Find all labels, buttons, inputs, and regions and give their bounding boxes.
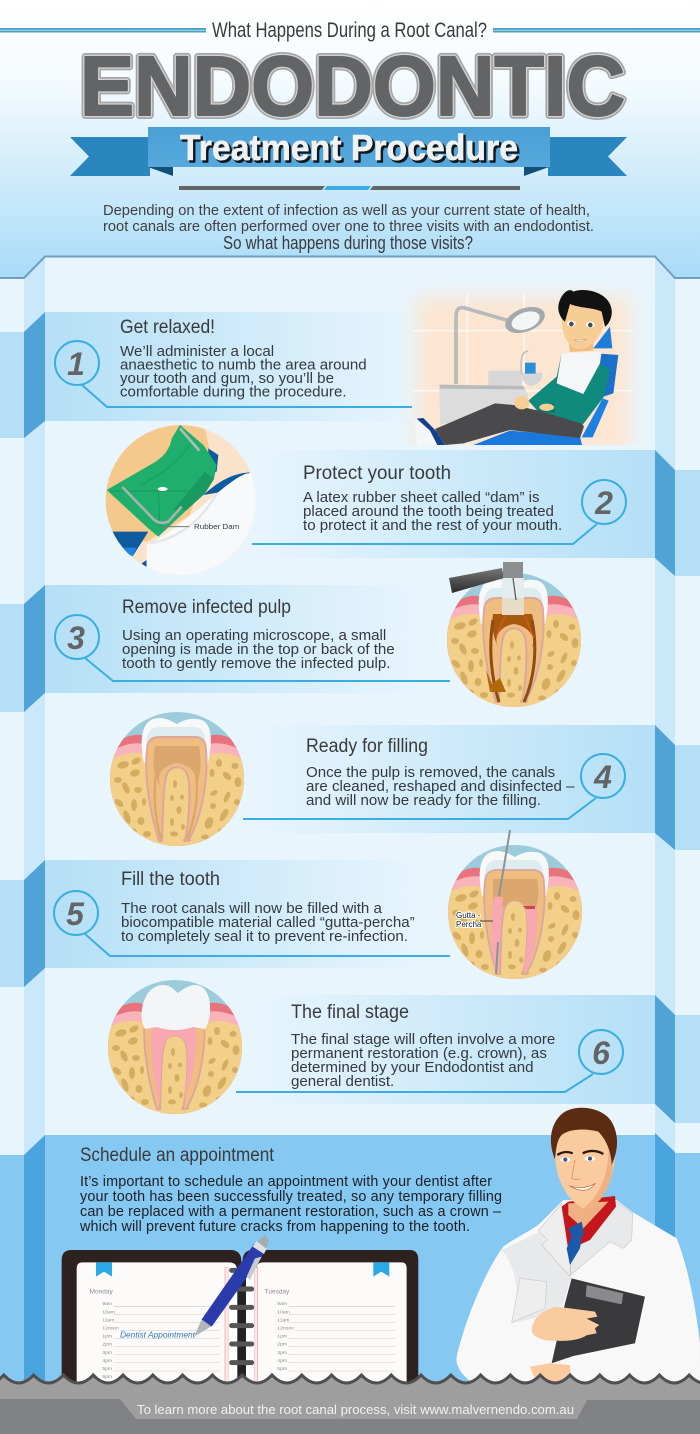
body text: tooth to gently remove the infected pulp. xyxy=(122,655,391,672)
illustration: appointment diary: 4pm xyxy=(102,1358,112,1364)
title: ENDODONTIC: ENDODONTIC xyxy=(80,39,625,133)
body text xyxy=(79,1174,502,1235)
footer link text: To learn more about the root canal process, visit www.malvernendo.com.au xyxy=(137,1402,574,1417)
illustration: appointment diary: 10am xyxy=(102,1309,115,1315)
step 4 panel xyxy=(45,709,655,849)
body text xyxy=(306,764,575,809)
illustration: cleaned tooth xyxy=(107,709,247,849)
illustration: appointment diary: 6pm xyxy=(102,1374,112,1380)
illustration: appointment diary: 3pm xyxy=(102,1350,112,1356)
body text: permanent restoration (e.g. crown), as xyxy=(291,1045,547,1062)
body text: to completely seal it to prevent re-infection. xyxy=(121,928,408,945)
side bands xyxy=(0,312,700,1123)
final panel: schedule an appointment xyxy=(0,1133,700,1395)
illustration: tooth being filled xyxy=(445,830,585,982)
title: Fill the tooth xyxy=(121,869,220,890)
number badge 2 xyxy=(252,480,626,544)
illustration: appointment diary: 11am xyxy=(102,1317,114,1323)
illustration: rubber dam: Rubber Dam xyxy=(194,522,239,531)
body text: your tooth and gum, so you’ll be xyxy=(120,370,334,387)
drill xyxy=(449,562,523,600)
label: gutta percha xyxy=(456,911,493,929)
number badge 5: 5 xyxy=(66,896,85,932)
illustration: appointment diary xyxy=(62,1235,418,1387)
title: Schedule an appointment xyxy=(80,1145,275,1166)
illustration: appointment diary: 9am xyxy=(102,1301,112,1307)
illustration: appointment diary: Tuesday xyxy=(265,1289,290,1296)
body text: anaesthetic to numb the area around xyxy=(120,356,367,374)
body text: A latex rubber sheet called “dam” is xyxy=(303,489,540,506)
body text: which will prevent future cracks from happening to the tooth. xyxy=(79,1219,470,1235)
illustration: appointment diary: Monday xyxy=(90,1289,113,1296)
illustration: appointment diary: 3pm xyxy=(277,1350,287,1356)
number badge 3: 3 xyxy=(67,620,85,656)
body text xyxy=(291,1031,555,1090)
number badge 6 xyxy=(236,1030,623,1092)
pen xyxy=(194,1235,269,1337)
illustration: appointment diary: 4pm xyxy=(277,1358,287,1364)
illustration: appointment diary: 1pm xyxy=(102,1333,112,1339)
footer: scalloped grey band xyxy=(0,1375,700,1434)
body text xyxy=(303,489,562,534)
label: gutta percha: Percha xyxy=(456,920,482,929)
intro text: root canals are often performed over one to three visits with an endodontist. xyxy=(103,219,594,235)
illustration: appointment diary: 5pm xyxy=(277,1366,287,1372)
body text: general dentist. xyxy=(291,1073,394,1090)
illustration: dentist with clipboard xyxy=(456,1108,700,1383)
step 3 panel xyxy=(45,562,655,710)
body text: We’ll administer a local xyxy=(120,343,274,360)
body text: The final stage will often involve a more xyxy=(291,1031,555,1048)
header line with subtitle: What Happens During a Root Canal? xyxy=(212,19,487,42)
body text xyxy=(122,627,395,672)
title: Remove infected pulp xyxy=(122,597,291,618)
illustration: appointment diary: 5pm xyxy=(102,1366,112,1372)
illustration: appointment diary: 2pm xyxy=(277,1342,287,1348)
body text: biocompatible material called “gutta-percha” xyxy=(121,914,415,931)
step 5 panel xyxy=(45,830,655,982)
body text: Once the pulp is removed, the canals xyxy=(306,764,555,781)
body text xyxy=(121,900,415,945)
intro text: Depending on the extent of infection as well as your current state of health, xyxy=(103,203,590,219)
number badge 3 xyxy=(55,615,450,681)
body text: your tooth has been successfully treated, so any temporary filling xyxy=(80,1189,502,1205)
title: Get relaxed! xyxy=(120,317,215,338)
header line with subtitle xyxy=(0,19,700,42)
body text: comfortable during the procedure. xyxy=(120,384,347,400)
body text: to protect it and the rest of your mouth. xyxy=(303,517,562,534)
body text: determined by your Endodontist and xyxy=(291,1059,534,1076)
illustration: appointment diary: 12noon xyxy=(102,1326,119,1332)
body text: Using an operating microscope, a small xyxy=(122,627,386,644)
number badge 6: 6 xyxy=(592,1035,610,1071)
divider xyxy=(179,186,520,190)
number badge 4 xyxy=(243,754,625,819)
number badge 4: 4 xyxy=(593,759,612,795)
title: ENDODONTIC: ENDODONTIC xyxy=(80,39,625,133)
body text: are cleaned, reshaped and disinfected – xyxy=(306,778,575,795)
body text: and will now be ready for the filling. xyxy=(306,792,541,809)
illustration: tooth with infected pulp and drill xyxy=(444,562,584,710)
illustration: appointment diary: Dentist Appointment xyxy=(120,1330,196,1340)
intro text: So what happens during those visits? xyxy=(223,233,473,253)
step 1 panel xyxy=(45,290,655,453)
illustration: appointment diary: 2pm xyxy=(102,1342,112,1348)
illustration: appointment diary: 12noon xyxy=(277,1326,294,1332)
body text: It’s important to schedule an appointment with your dentist after xyxy=(80,1174,492,1190)
title: Ready for filling xyxy=(306,736,428,757)
illustration: tooth with crown xyxy=(105,977,245,1117)
body text xyxy=(120,343,367,400)
step 2 panel xyxy=(106,425,655,575)
intro text xyxy=(103,203,594,253)
body text: placed around the tooth being treated xyxy=(303,503,554,520)
number badge 1: 1 xyxy=(67,346,85,382)
illustration: appointment diary: 10am xyxy=(277,1309,290,1315)
illustration: appointment diary: 1pm xyxy=(277,1333,287,1339)
illustration: appointment diary: 11am xyxy=(277,1317,289,1323)
illustration: appointment diary: 9am xyxy=(277,1301,287,1307)
body text: opening is made in the top or back of the xyxy=(122,641,395,658)
step 6 panel xyxy=(45,977,655,1117)
title: ENDODONTIC: ENDODONTIC xyxy=(80,39,625,133)
ribbon: Treatment Procedure: Treatment Procedure xyxy=(180,127,518,168)
label: gutta percha: Gutta - xyxy=(456,911,481,920)
number badge 5 xyxy=(54,891,450,956)
number badge 2: 2 xyxy=(594,485,613,521)
illustration: rubber dam xyxy=(103,422,263,578)
body text: The root canals will now be filled with a xyxy=(121,900,383,917)
body text: can be replaced with a permanent restoration, such as a crown – xyxy=(80,1204,501,1220)
ribbon: Treatment Procedure: Treatment Procedure xyxy=(182,129,520,170)
ribbon: Treatment Procedure xyxy=(70,127,627,176)
illustration: patient in dental chair xyxy=(413,290,633,453)
title: Protect your tooth xyxy=(303,463,451,484)
number badge 1 xyxy=(55,341,412,407)
title: The final stage xyxy=(291,1002,409,1023)
